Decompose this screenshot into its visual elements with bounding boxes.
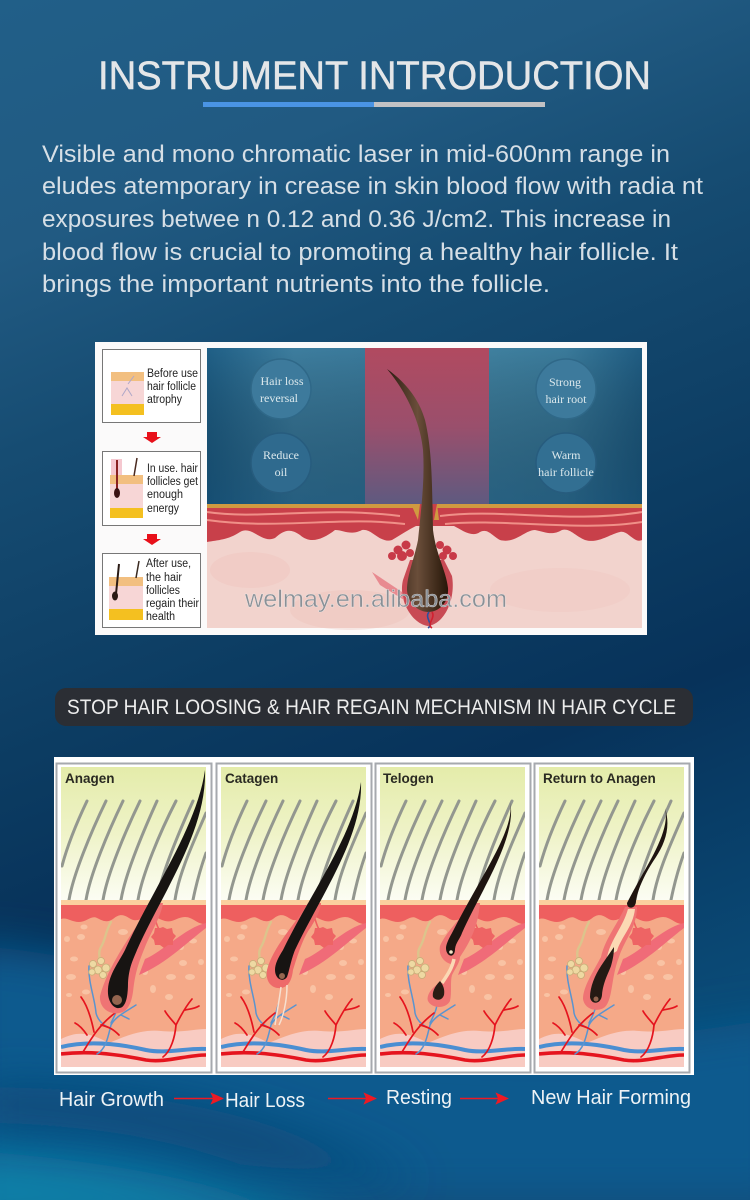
section banner — [55, 688, 693, 726]
step box: before use: Before use — [147, 368, 198, 380]
caption: hair loss: Hair Loss — [225, 1090, 305, 1112]
step box: after use: After use, — [146, 558, 191, 570]
badge: warm hair follicle: hair follicle — [538, 465, 594, 479]
watermark: welmay.en.alibaba.com — [244, 586, 507, 613]
badge: strong hair root: Strong — [549, 375, 581, 389]
badge: hair loss reversal: reversal — [260, 391, 299, 405]
oil glands — [388, 540, 457, 561]
step box: after use: health — [146, 611, 175, 623]
stage: telogen: Telogen — [383, 771, 434, 786]
intro paragraph: Visible and mono chromatic laser in mid-600nm range in — [42, 141, 670, 168]
badge: hair loss reversal: Hair loss — [260, 374, 304, 388]
step box: in use: energy — [147, 503, 179, 515]
arrow: down 1 — [143, 432, 161, 443]
follicle sheath — [402, 560, 453, 626]
stage: anagen: Anagen — [65, 771, 115, 786]
intro paragraph: exposures betwee n 0.12 and 0.36 J/cm2. This increase in — [42, 206, 671, 233]
step box: in use: enough — [147, 489, 183, 501]
badge: reduce oil — [251, 433, 311, 493]
panel: hair cycle diagram — [54, 757, 694, 1075]
badge: reduce oil: Reduce — [263, 448, 299, 462]
badge: warm hair follicle — [536, 433, 596, 493]
step box: before use: hair follicle — [147, 381, 196, 393]
step box: before use — [102, 350, 200, 422]
illustration: laser on scalp — [207, 348, 642, 630]
intro paragraph: eludes atemporary in crease in skin blood flow with radia nt — [42, 173, 703, 200]
stage: return to anagen: Return to Anagen — [543, 771, 656, 786]
arrow: growth to loss — [174, 1094, 222, 1103]
badge: hair loss reversal — [251, 359, 311, 419]
stage: telogen — [376, 764, 530, 1072]
step box: before use: atrophy — [147, 394, 182, 406]
panel: laser treatment image — [95, 342, 647, 635]
caption: new hair forming: New Hair Forming — [531, 1087, 691, 1109]
title underline — [203, 102, 545, 107]
step box: after use — [102, 554, 200, 628]
section banner: STOP HAIR LOOSING & HAIR REGAIN MECHANISM IN HAIR CYCLE — [67, 696, 676, 719]
arrow: down 2 — [143, 534, 161, 545]
intro paragraph — [42, 141, 703, 298]
arrow: loss to resting — [328, 1094, 375, 1103]
stage: catagen — [216, 764, 372, 1072]
step box: after use: regain their — [146, 598, 199, 610]
intro paragraph: blood flow is crucial to promoting a healthy hair follicle. It — [42, 239, 678, 266]
step box: in use — [102, 452, 200, 526]
stage: anagen — [56, 764, 212, 1072]
step box: in use: follicles get — [147, 476, 199, 488]
step box: in use: In use. hair — [147, 463, 198, 475]
caption: hair growth: Hair Growth — [59, 1089, 164, 1111]
hair shaft — [387, 369, 448, 612]
step box: after use: the hair — [146, 572, 182, 584]
badge: reduce oil: oil — [275, 465, 288, 479]
intro paragraph: brings the important nutrients into the follicle. — [42, 271, 550, 298]
stage: catagen: Catagen — [225, 771, 278, 786]
badge: strong hair root — [536, 359, 596, 419]
badge: strong hair root: hair root — [546, 392, 587, 406]
caption: resting: Resting — [386, 1087, 452, 1109]
title: INSTRUMENT INTRODUCTION — [98, 54, 651, 98]
badge: warm hair follicle: Warm — [551, 448, 581, 462]
stage: return to anagen — [534, 764, 690, 1072]
step box: after use: follicles — [146, 585, 180, 597]
arrow: resting to new hair — [460, 1094, 507, 1103]
